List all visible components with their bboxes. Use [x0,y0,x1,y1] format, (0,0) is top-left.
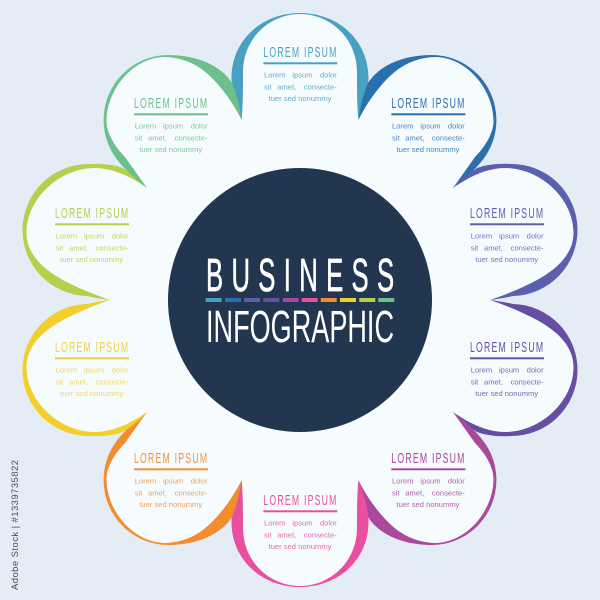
text block: purple: consecte- [511,378,544,387]
text block: yellow: tuer sed nonummy [60,389,123,398]
text block: yellow: Lorem [56,366,77,375]
title: INFOGRAPHIC: INFOGRAPHIC [206,301,394,352]
text block: green [134,95,208,154]
text block: indigo: LOREM IPSUM [470,205,543,222]
text block: purple: LOREM IPSUM [470,339,543,356]
title: BUSINESS: BUSINESS [206,249,394,301]
text block: yellow: ipsum [84,366,104,375]
text block: lime: sit [56,244,64,253]
text block: teal: amet, [277,83,296,92]
text block: orange [134,450,208,509]
text block: indigo: dolor [527,232,544,241]
text block: lime: LOREM IPSUM [55,205,128,222]
text block: blue: sit [392,134,400,143]
colour bar strip [206,298,394,302]
text block: magenta [391,450,465,509]
text block: lime: consecte- [96,244,129,253]
text block: teal: sit [264,83,272,92]
text block: lime: tuer sed nonummy [60,255,123,264]
text block: pink: Lorem [264,519,286,528]
text block: orange: amet, [148,489,167,498]
text block: blue: amet, [405,134,424,143]
text block: purple: ipsum [499,366,519,375]
text block: magenta: LOREM IPSUM [391,450,464,467]
text block: blue: dolor [448,122,465,131]
text block: magenta: consecte- [432,489,465,498]
text block: magenta: Lorem [392,477,414,486]
text block: teal: dolor [320,71,337,80]
text block: purple: Lorem [471,366,492,375]
text block: indigo: sit [471,244,479,253]
text block: green: amet, [148,134,167,143]
text block: pink: consecte- [304,531,337,540]
text block: blue: ipsum [420,122,441,131]
text block: green: consecte- [175,134,208,143]
text block: purple: amet, [484,378,503,387]
text block: magenta: ipsum [420,477,441,486]
text block: teal [263,44,337,103]
text block: indigo: consecte- [511,244,544,253]
centre circle [168,168,432,432]
text block: blue [391,95,465,154]
text block: magenta: dolor [448,477,465,486]
text block: indigo [470,205,544,264]
text block: pink [263,492,337,551]
text block: lime: ipsum [84,232,104,241]
text block: yellow: sit [56,378,64,387]
text block: yellow: amet, [69,378,88,387]
text block: yellow: LOREM IPSUM [55,339,128,356]
text block: indigo: Lorem [471,232,492,241]
text block: teal: ipsum [292,71,313,80]
text block: blue: consecte- [432,134,465,143]
text block: pink: amet, [277,531,296,540]
text block: green: Lorem [135,122,156,131]
text block: lime: amet, [69,244,88,253]
text block: green: ipsum [163,122,183,131]
text block: green: LOREM IPSUM [134,95,207,112]
text block: green: dolor [191,122,208,131]
text block: blue: LOREM IPSUM [391,95,464,112]
text block: yellow: dolor [112,366,129,375]
text block: purple: tuer sed nonummy [475,389,538,398]
text block: lime: dolor [112,232,129,241]
text block: indigo: ipsum [499,232,519,241]
text block: pink: ipsum [292,519,313,528]
stock credit: Adobe Stock | #1339735822 [10,460,21,590]
text block: purple [470,339,544,398]
text block: orange: consecte- [175,489,208,498]
text block: green: tuer sed nonummy [139,145,202,154]
text block: pink: tuer sed nonummy [269,542,332,551]
text block: orange: LOREM IPSUM [134,450,207,467]
text block: lime [55,205,129,264]
text block: orange: dolor [191,477,208,486]
text block: indigo: tuer sed nonummy [475,255,538,264]
text block: orange: sit [135,489,143,498]
text block: teal: LOREM IPSUM [263,44,336,61]
text block: orange: ipsum [163,477,183,486]
text block: orange: Lorem [135,477,156,486]
text block: pink: sit [264,531,272,540]
text block: teal: consecte- [304,83,337,92]
text block: magenta: tuer sed nonummy [397,500,460,509]
text block: yellow: consecte- [96,378,129,387]
text block: indigo: amet, [484,244,503,253]
text block: green: sit [135,134,143,143]
text block: orange: tuer sed nonummy [139,500,202,509]
text block: purple: sit [471,378,479,387]
text block: magenta: amet, [405,489,424,498]
text block: blue: tuer sed nonummy [397,145,460,154]
text block: purple: dolor [527,366,544,375]
text block: pink: dolor [320,519,337,528]
text block: teal: tuer sed nonummy [269,94,332,103]
text block: teal: Lorem [264,71,286,80]
text block: lime: Lorem [56,232,77,241]
text block: pink: LOREM IPSUM [263,492,336,509]
text block: magenta: sit [392,489,400,498]
text block: blue: Lorem [392,122,414,131]
text block: yellow [55,339,129,398]
